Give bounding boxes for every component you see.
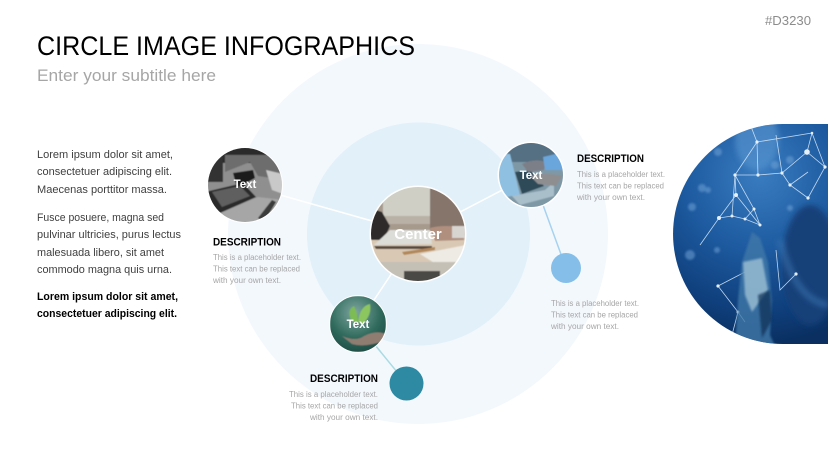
placeholder text: blue dot: This text can be replaced (551, 310, 638, 320)
placeholder text: blue dot: This is a placeholder text. (551, 299, 639, 308)
subtitle: Enter your subtitle here (37, 66, 216, 85)
outer circle (228, 44, 608, 424)
left text block: malesuada libero, sit amet (37, 247, 164, 259)
description: bottom (289, 373, 378, 422)
left text block: Fusce posuere, magna sed (37, 212, 164, 224)
left text block: Maecenas porttitor massa. (37, 184, 167, 196)
description: top right: with your own text. (576, 193, 645, 202)
light blue dot (551, 253, 581, 283)
placeholder text: blue dot (550, 299, 639, 331)
left text block: commodo magna quis urna. (37, 264, 172, 276)
left text block (37, 149, 181, 320)
label: Text: Text (520, 170, 543, 182)
description: bottom: This text can be replaced (291, 402, 378, 410)
left text block: Lorem ipsum dolor sit amet, (37, 149, 173, 161)
left text block: pulvinar ultricies, purus lectus (37, 229, 181, 241)
image circle: network hand (670, 110, 829, 348)
description: bottom: DESCRIPTION (310, 373, 378, 385)
description: left: with your own text. (212, 276, 281, 285)
description: left (212, 236, 301, 285)
description: left: This text can be replaced (213, 264, 300, 274)
code label: #D3230 (765, 13, 811, 28)
label: Text: Text (347, 319, 370, 331)
placeholder text: blue dot: with your own text. (550, 322, 619, 331)
left text block: Lorem ipsum dolor sit amet, (37, 291, 178, 303)
connector lines (245, 175, 566, 383)
label: Center: Center (394, 226, 442, 243)
description: bottom: This is a placeholder text. (289, 390, 378, 399)
description: left: This is a placeholder text. (213, 253, 301, 262)
description: top right (576, 153, 665, 202)
description: left: DESCRIPTION (213, 236, 281, 248)
left text block: consectetuer adipiscing elit. (37, 308, 177, 320)
image circle: plant (329, 295, 387, 353)
image circle: center (370, 186, 466, 284)
description: top right: This text can be replaced (577, 182, 664, 190)
image circle: laptop left (208, 148, 283, 223)
left text block: consectetuer adipiscing elit. (37, 166, 172, 178)
description: top right: This is a placeholder text. (577, 170, 665, 179)
title: CIRCLE IMAGE INFOGRAPHICS (37, 31, 415, 61)
description: top right: DESCRIPTION (577, 153, 644, 165)
label: Text: Text (234, 179, 257, 191)
image circle: laptop right (498, 142, 564, 208)
teal dot (390, 366, 424, 400)
inner circle (307, 122, 530, 346)
description: bottom: with your own text. (309, 413, 378, 422)
